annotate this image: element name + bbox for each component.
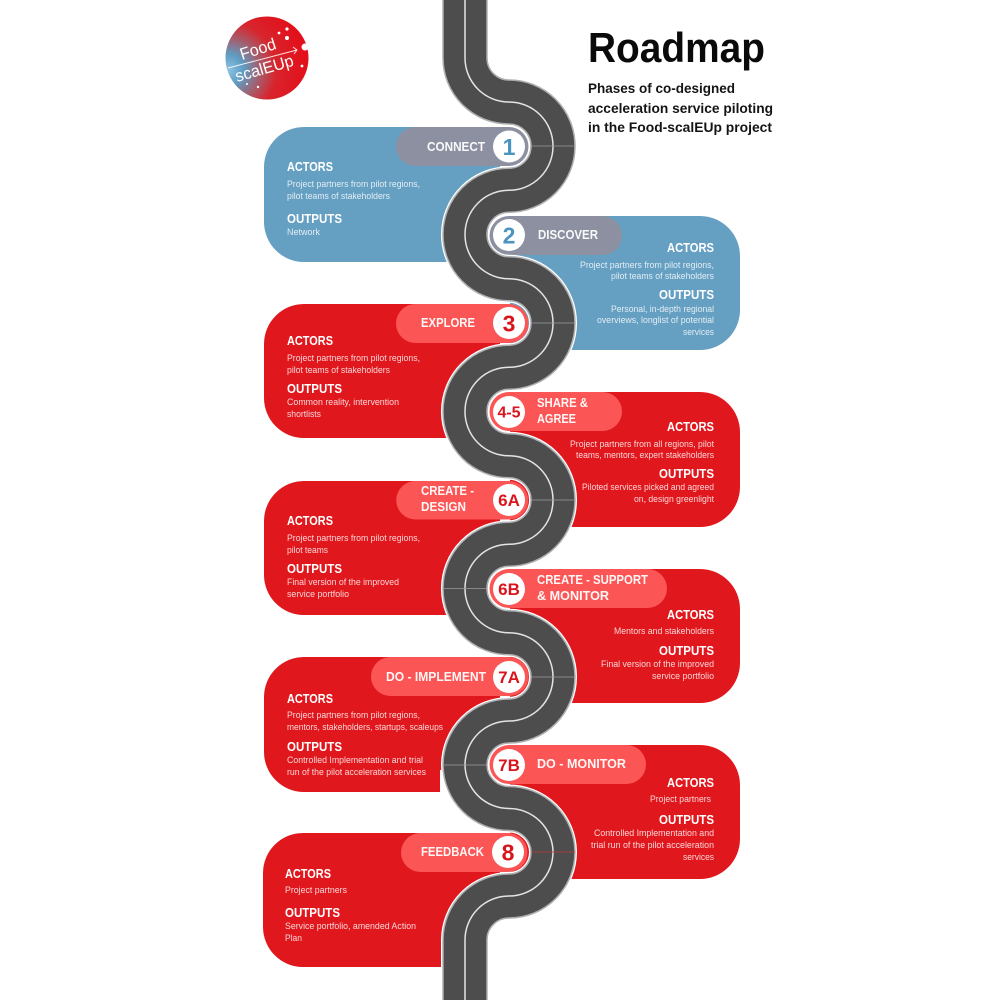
panel: 2 discover: 2 xyxy=(503,222,515,248)
panel: 2 discover: services xyxy=(683,327,714,337)
panel: 8 feedback: Service portfolio, amended Action xyxy=(285,921,416,931)
panel: 2 discover: pilot teams of stakeholders xyxy=(611,271,714,281)
panel: 8 feedback: ACTORS xyxy=(285,867,331,881)
panel: 7A do implement xyxy=(264,657,528,792)
panel: 3 explore: ACTORS xyxy=(287,334,333,348)
panel: 2 discover: OUTPUTS xyxy=(659,288,714,302)
panel: 3 explore: Project partners from pilot regions, xyxy=(287,353,420,363)
panel: 4-5 share and agree: Piloted services picked and agreed xyxy=(582,482,714,492)
panel: 2 discover: ACTORS xyxy=(667,241,714,255)
panel: 1 connect: OUTPUTS xyxy=(287,212,342,226)
panel: 1 connect xyxy=(264,127,528,262)
panel: 2 discover: Project partners from pilot regions, xyxy=(580,260,714,270)
panel: 1 connect: Project partners from pilot regions, xyxy=(287,179,420,189)
panel: 8 feedback: Project partners xyxy=(285,885,347,895)
panel: 6A create design: Final version of the improved xyxy=(287,577,399,587)
panel: 7B do monitor: 7B xyxy=(498,756,520,775)
panel: 7B do monitor: OUTPUTS xyxy=(659,813,714,827)
panel: 8 feedback: OUTPUTS xyxy=(285,906,340,920)
panel: 7A do implement: 7A xyxy=(498,668,520,687)
panel: 6B create support and monitor: OUTPUTS xyxy=(659,644,714,658)
panel: 3 explore: shortlists xyxy=(287,409,321,419)
panel: 7B do monitor: Controlled Implementation and xyxy=(594,828,714,838)
panel: 4-5 share and agree xyxy=(490,392,740,527)
panel: 6A create design: OUTPUTS xyxy=(287,562,342,576)
winding road xyxy=(443,0,575,1000)
panel: 4-5 share and agree: Project partners from all regions, pilot xyxy=(570,439,714,449)
panel: 1 connect: pilot teams of stakeholders xyxy=(287,191,390,201)
panel: 4-5 share and agree: OUTPUTS xyxy=(659,467,714,481)
panel: 7B do monitor: services xyxy=(683,852,714,862)
panel: 4-5 share and agree: 4-5 xyxy=(497,404,521,422)
panel: 8 feedback xyxy=(263,833,528,967)
panel: 6A create design: ACTORS xyxy=(287,514,333,528)
panel: 6B create support and monitor: CREATE - SUPPORT xyxy=(537,573,648,587)
panel: 6A create design: DESIGN xyxy=(421,500,466,514)
panel: 3 explore: Common reality, intervention xyxy=(287,397,399,407)
panel: 6A create design: 6A xyxy=(498,491,520,510)
panel: 8 feedback: 8 xyxy=(502,840,515,866)
subtitle xyxy=(588,80,773,135)
panel: 3 explore: pilot teams of stakeholders xyxy=(287,365,390,375)
panel: 7A do implement: run of the pilot acceleration services xyxy=(287,767,426,777)
panel: 2 discover xyxy=(490,216,740,350)
panel: 7B do monitor: DO - MONITOR xyxy=(537,757,626,771)
panel: 7B do monitor: ACTORS xyxy=(667,776,714,790)
panel: 4-5 share and agree: teams, mentors, expert stakeholders xyxy=(576,450,714,460)
logo: Food-scalEUp: scalEUp xyxy=(233,52,296,86)
panel: 6B create support and monitor: Final version of the improved xyxy=(601,659,714,669)
panel: 6B create support and monitor: & MONITOR xyxy=(537,589,609,603)
panel: 7B do monitor: trial run of the pilot acceleration xyxy=(591,840,714,850)
panel: 4-5 share and agree: ACTORS xyxy=(667,420,714,434)
panel: 6B create support and monitor: 6B xyxy=(498,580,520,599)
panel: 6A create design: service portfolio xyxy=(287,589,349,599)
panel: 4-5 share and agree: on, design greenlight xyxy=(634,494,714,504)
panel: 3 explore: 3 xyxy=(503,310,515,336)
panel: 8 feedback: FEEDBACK xyxy=(421,845,484,859)
panel: 8 feedback: Plan xyxy=(285,933,302,943)
subtitle: in the Food-scalEUp project xyxy=(588,119,772,135)
panel: 6A create design: Project partners from pilot regions, xyxy=(287,533,420,543)
panel: 2 discover: overviews, longlist of potential xyxy=(597,315,714,325)
panel: 7A do implement: mentors, stakeholders, startups, scaleups xyxy=(287,722,443,732)
panel: 7A do implement: OUTPUTS xyxy=(287,740,342,754)
panel: 7B do monitor xyxy=(490,745,740,879)
panel: 6B create support and monitor xyxy=(490,569,740,703)
panel: 1 connect: Network xyxy=(287,227,320,237)
subtitle: Phases of co-designed xyxy=(588,80,735,96)
panel: 3 explore: OUTPUTS xyxy=(287,382,342,396)
panel: 6B create support and monitor: Mentors and stakeholders xyxy=(614,626,714,636)
title: Roadmap xyxy=(588,24,765,71)
panel: 1 connect: ACTORS xyxy=(287,160,333,174)
panel: 6A create design: CREATE - xyxy=(421,484,474,498)
panel: 7A do implement: ACTORS xyxy=(287,692,333,706)
panel: 2 discover: DISCOVER xyxy=(538,228,598,242)
panel: 6A create design xyxy=(264,481,528,615)
panel: 3 explore: EXPLORE xyxy=(421,316,475,330)
panel: 2 discover: Personal, in-depth regional xyxy=(611,304,714,314)
panel: 6B create support and monitor: service portfolio xyxy=(652,671,714,681)
panel: 7A do implement: Controlled Implementation and trial xyxy=(287,755,423,765)
panel: 4-5 share and agree: AGREE xyxy=(537,412,576,426)
panel: 6B create support and monitor: ACTORS xyxy=(667,608,714,622)
panel: 3 explore xyxy=(264,304,528,438)
logo: Food-scalEUp xyxy=(226,16,308,100)
subtitle: acceleration service piloting xyxy=(588,100,773,116)
panel: 1 connect: 1 xyxy=(503,134,516,160)
panel: 1 connect: CONNECT xyxy=(427,140,485,154)
panel: 7B do monitor: Project partners xyxy=(650,794,711,804)
panel: 7A do implement: Project partners from pilot regions, xyxy=(287,710,420,720)
panel: 6A create design: pilot teams xyxy=(287,545,328,555)
panel: 4-5 share and agree: SHARE & xyxy=(537,396,588,410)
panel: 7A do implement: DO - IMPLEMENT xyxy=(386,670,486,684)
logo: Food-scalEUp: Food xyxy=(238,35,278,64)
